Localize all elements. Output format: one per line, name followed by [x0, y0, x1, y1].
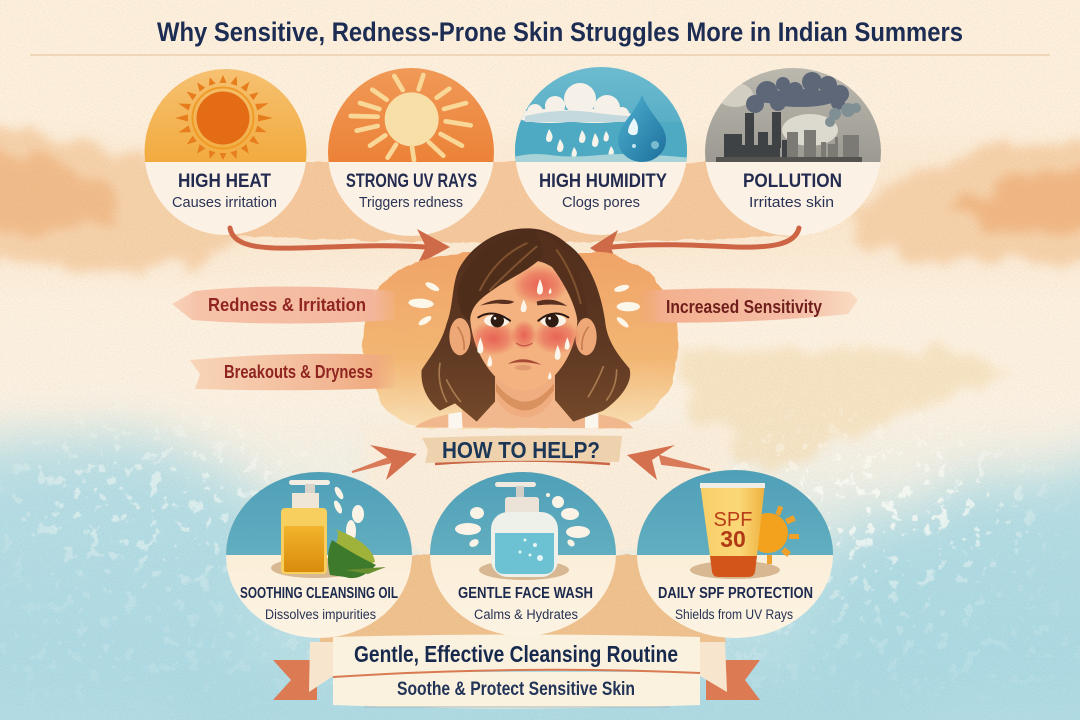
- arrow: heat to face: [230, 228, 450, 265]
- hair strands: [439, 363, 617, 402]
- label: high humidity: Clogs pores: [562, 194, 640, 211]
- icon: water drop: [618, 95, 666, 162]
- symptom: increased sensitivity: Increased Sensitivity: [666, 297, 822, 317]
- label: high humidity: [539, 171, 667, 211]
- symptom: redness and irritation: Redness & Irritation: [208, 295, 366, 315]
- panel: soothing cleansing oil: [222, 470, 416, 638]
- icon: aloe leaves: [328, 528, 386, 578]
- eyes: [484, 314, 509, 327]
- ribbon: cleansing routine: [273, 634, 760, 708]
- label: gentle face wash: [458, 585, 593, 622]
- icon: orange sun: [175, 75, 273, 160]
- redness: [469, 321, 517, 356]
- icon: oil bottle: [281, 480, 330, 574]
- mouth: [508, 359, 542, 365]
- symptom: breakouts and dryness: [190, 354, 395, 390]
- label: strong uv rays: [346, 171, 477, 211]
- icon: sunscreen tube: SPF: [714, 509, 752, 531]
- orange halo behind face: [363, 253, 678, 428]
- neck: [495, 367, 555, 417]
- character: distressed girl: [415, 228, 633, 428]
- icon: pale sun: [351, 75, 471, 160]
- face: [470, 260, 577, 391]
- label: pollution: [743, 171, 842, 211]
- brows: [480, 300, 514, 306]
- panel: high heat: [140, 65, 310, 235]
- label: daily spf protection: DAILY SPF PROTECTION: [658, 585, 813, 602]
- icon: splash drops: [332, 485, 364, 542]
- icon: smoke: [746, 72, 861, 127]
- label: soothing cleansing oil: SOOTHING CLEANSING OIL: [240, 585, 398, 602]
- label: gentle face wash: Calms & Hydrates: [474, 607, 578, 622]
- ribbon: cleansing routine: Gentle, Effective Cleansing Routine: [354, 641, 678, 667]
- label: high heat: HIGH HEAT: [178, 171, 271, 192]
- label: soothing cleansing oil: [240, 585, 398, 622]
- title: Why Sensitive, Redness-Prone Skin Struggles More in Indian Summers: [157, 17, 963, 47]
- label: high heat: Causes irritation: [172, 194, 277, 211]
- arrow: pollution to face: [590, 228, 799, 266]
- label: soothing cleansing oil: Dissolves impurities: [265, 607, 376, 622]
- label: strong uv rays: Triggers redness: [359, 194, 463, 211]
- arrow: lower right: [627, 445, 710, 480]
- icon: sunscreen tube: 30: [720, 526, 746, 552]
- symptom: increased sensitivity: [640, 288, 858, 323]
- bangs: [458, 233, 543, 320]
- icon: sweat splashes: [408, 280, 640, 329]
- label: strong uv rays: STRONG UV RAYS: [346, 171, 477, 192]
- symptom: breakouts and dryness: Breakouts & Dryness: [224, 362, 373, 382]
- label: high heat: [172, 171, 277, 211]
- tank straps: [448, 412, 598, 428]
- panel: gentle face wash: [426, 470, 620, 636]
- label: pollution: POLLUTION: [743, 171, 842, 192]
- sweat drops: [477, 279, 570, 379]
- hair back: [421, 228, 630, 422]
- arrow: lower left: [352, 445, 417, 480]
- label: daily spf protection: [658, 585, 813, 622]
- label: daily spf protection: Shields from UV Rays: [675, 607, 793, 622]
- icon: small sun: [748, 506, 799, 564]
- label: gentle face wash: GENTLE FACE WASH: [458, 585, 593, 602]
- icon: pump bottle: [491, 482, 558, 577]
- icon: sunscreen tube: [700, 483, 765, 577]
- nose: [517, 343, 532, 346]
- panel: strong uv rays: [325, 65, 497, 236]
- shoulders and chest: [415, 390, 633, 428]
- banner: how to help: HOW TO HELP?: [442, 437, 600, 463]
- symptom: redness and irritation: [172, 286, 395, 324]
- panel: high humidity: [510, 62, 692, 235]
- ears: [449, 318, 471, 355]
- label: high humidity: HIGH HUMIDITY: [539, 171, 667, 192]
- panel: pollution: [700, 62, 886, 236]
- icon: factory: [716, 112, 862, 162]
- label: pollution: Irritates skin: [749, 194, 834, 211]
- ribbon: cleansing routine: Soothe & Protect Sensitive Skin: [397, 679, 635, 700]
- icon: splash drops: [455, 493, 590, 549]
- panel: daily spf protection: [633, 468, 837, 638]
